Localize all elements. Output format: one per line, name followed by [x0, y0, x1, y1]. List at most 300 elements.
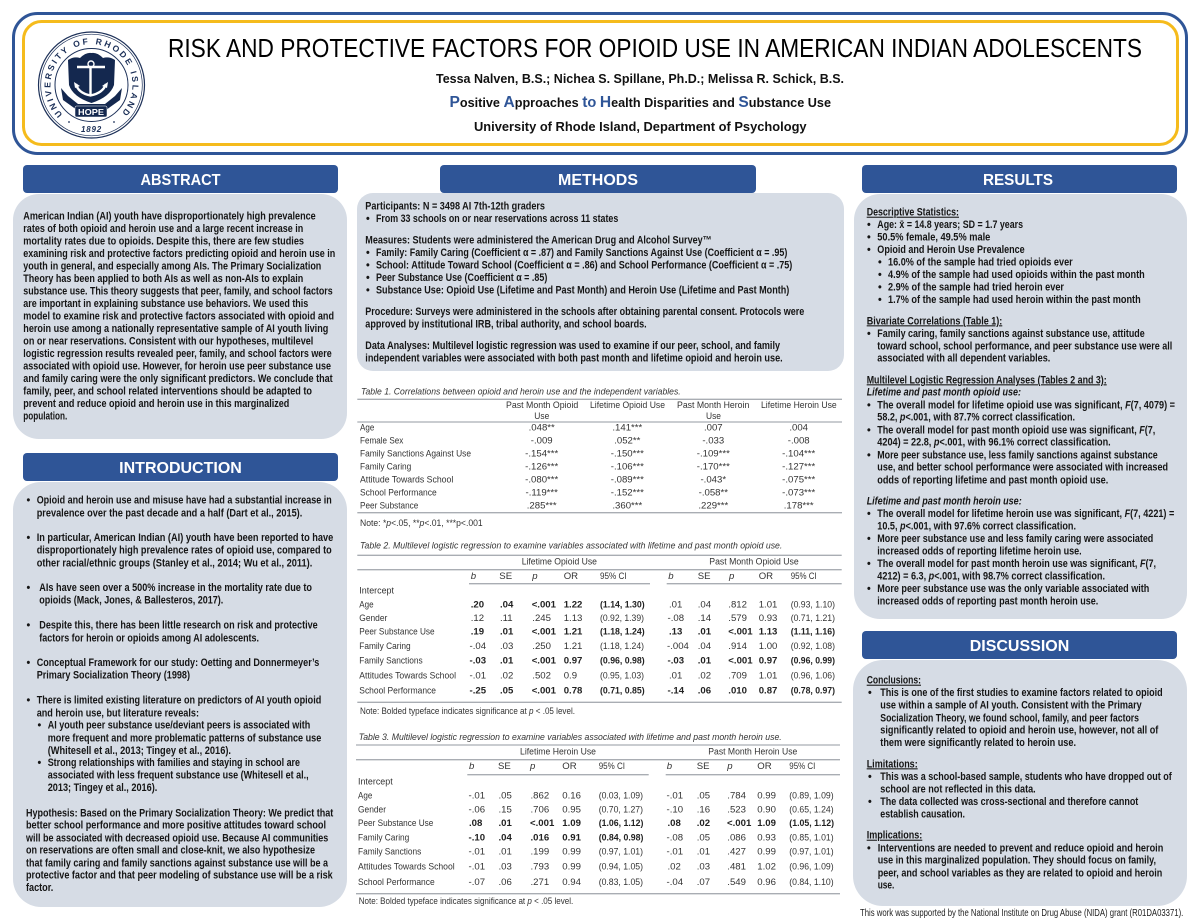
table 2 rows: Age	[359, 599, 374, 610]
regression analyses: Lifetime and past month opioid use:	[867, 387, 1021, 399]
heading: discussion: DISCUSSION	[970, 638, 1069, 655]
table 2 column headers: SE	[698, 571, 711, 582]
table 2 rows: <.001	[728, 627, 753, 638]
table 3 rows: .08	[668, 818, 682, 829]
table 3 rows: .01	[498, 847, 512, 858]
table 3 column headers: Lifetime Heroin Use	[520, 746, 596, 757]
methods text: School: Attitude Toward School (Coefficient α = .86) and School Performance (Coefficient α = .75)	[376, 260, 793, 272]
icon: University of Rhode Island seal: 1892	[81, 125, 102, 134]
table 3 rows: Family Sanctions	[358, 847, 421, 858]
table 3 rows: (0.83, 1.05)	[599, 877, 643, 888]
table 3 column headers: Past Month Heroin Use	[708, 746, 797, 757]
introduction bullets: •	[26, 495, 30, 507]
methods text: •	[366, 260, 370, 272]
methods text: •	[366, 285, 370, 297]
table 2 rows: (0.92, 1.39)	[600, 613, 644, 624]
table 2 rows: (0.95, 1.03)	[600, 670, 644, 681]
table 3: heroin regression	[356, 732, 840, 907]
heading: methods: METHODS	[558, 172, 638, 189]
table 3 rows: 0.16	[562, 791, 581, 802]
table 2 rows: .01	[669, 670, 682, 681]
abstract text: prevent and reduce opioid and heroin use in this marginalized	[23, 398, 289, 410]
table 3 rows: -.01	[468, 791, 485, 802]
introduction bullets: There is limited existing literature on predictors of AI youth opioid	[37, 695, 321, 707]
table 1: correlations	[357, 386, 842, 529]
conclusions: use within a sample of AI youth. Consistent with the Primary	[880, 700, 1142, 712]
table 3 rows: 1.09	[757, 818, 776, 829]
table 3 rows: .706	[530, 804, 549, 815]
table 1 rows: -.043*	[700, 474, 726, 485]
table 3 rows: Intercept	[358, 776, 393, 787]
table 2 column headers: OR	[564, 571, 578, 582]
table 2 rows: .11	[500, 613, 513, 624]
panel: abstract	[13, 165, 347, 439]
table 2 rows: .01	[669, 599, 682, 610]
table 2 rows: .579	[728, 613, 747, 624]
implications	[867, 830, 1163, 892]
table 3 rows: .05	[697, 832, 710, 843]
table 3 rows: 1.02	[757, 862, 776, 873]
table 1 rows: -.127***	[782, 462, 815, 473]
table 3 rows: .03	[498, 862, 512, 873]
descriptive statistics: Age: x̄ = 14.8 years; SD = 1.7 years	[877, 219, 1023, 231]
table 2 rows: <.001	[532, 655, 557, 666]
table 1 rows: .048**	[529, 423, 555, 434]
table 3 rows: -.06	[468, 804, 485, 815]
table 3 rows: .06	[498, 877, 512, 888]
descriptive statistics: •	[878, 282, 882, 294]
table 2 rows: .709	[728, 670, 747, 681]
abstract text: are important in explaining substance use behaviors. We used this	[23, 298, 308, 310]
table 3 rows: 0.95	[562, 804, 581, 815]
table 3 column headers: OR	[562, 761, 577, 772]
introduction bullets: prevalence over the past decade and a half (Dart et al., 2015).	[37, 507, 302, 519]
limitations: establish causation.	[880, 808, 965, 820]
heading: introduction	[23, 453, 338, 481]
introduction bullets: other racial/ethnic groups (Stanley et al., 2014; Wu et al., 2011).	[37, 557, 312, 569]
table 3 column headers: p	[726, 761, 733, 772]
table 2 rows: Family Caring	[359, 641, 411, 652]
methods text: •	[366, 272, 370, 284]
methods text: Family: Family Caring (Coefficient α = .87) and Family Sanctions Against Use (Coefficient α = .95)	[376, 247, 788, 259]
regression analyses: •	[867, 399, 871, 411]
table 3 rows: .271	[530, 877, 549, 888]
introduction bullets: •	[38, 757, 42, 769]
table 2 column headers: SE	[499, 571, 512, 582]
descriptive statistics: 2.9% of the sample had tried heroin ever	[888, 282, 1064, 294]
introduction bullets: In particular, American Indian (AI) youth have been reported to have	[37, 532, 333, 544]
table 2 column headers: 95% CI	[791, 571, 817, 582]
introduction bullets: •	[26, 582, 30, 594]
panel: discussion	[853, 631, 1187, 906]
table 3 rows: (0.85, 1.01)	[789, 832, 834, 843]
table 3 rows: -.01	[666, 847, 683, 858]
bivariate correlations	[867, 315, 1172, 365]
heading: introduction: INTRODUCTION	[119, 460, 242, 477]
regression analyses: The overall model for past month heroin use was significant, F(7,	[877, 558, 1156, 570]
table 2 rows: (0.71, 1.21)	[791, 613, 835, 624]
descriptive statistics: •	[867, 244, 871, 256]
descriptive statistics: •	[867, 232, 871, 244]
table 2 column headers: Lifetime Opioid Use	[522, 556, 597, 567]
authors: Tessa Nalven, B.S.; Nichea S. Spillane, Ph.D.; Melissa R. Schick, B.S.	[436, 72, 844, 86]
table 3 rows: .02	[697, 818, 710, 829]
regression analyses: The overall model for past month opioid use was significant, F(7,	[877, 424, 1155, 436]
conclusions	[867, 675, 1163, 749]
methods text: Procedure: Surveys were administered in the schools after obtaining parental consent. Protocols were	[365, 306, 804, 318]
table 3 rows: 0.93	[757, 832, 776, 843]
table 3 rows: .05	[498, 791, 512, 802]
table 2 rows: -.03	[470, 655, 486, 666]
table 3 rows: .01	[697, 847, 710, 858]
table 3 rows: (0.94, 1.05)	[599, 862, 643, 873]
icon: University of Rhode Island seal: UNIVERSITY OF RHODE ISLAND	[44, 38, 138, 118]
table 1 column headers	[506, 400, 837, 422]
table 3 rows: 0.94	[562, 877, 582, 888]
table 3 rows: 0.99	[757, 791, 776, 802]
table 2 column headers: OR	[759, 571, 773, 582]
table 1 note: Note: *p<.05, **p<.01, ***p<.001	[360, 518, 483, 529]
table 1 rows: -.033	[702, 436, 724, 447]
abstract text: Theory has been applied to both AIs as well as non-AIs to explain	[23, 273, 303, 285]
descriptive statistics: •	[878, 294, 882, 306]
abstract text: American Indian (AI) youth have disproportionately high prevalence	[23, 211, 316, 223]
regression analyses: The overall model for lifetime opioid use was significant, F(7, 4079) =	[877, 399, 1175, 411]
regression analyses: Multilevel Logistic Regression Analyses (Tables 2 and 3):	[867, 374, 1107, 386]
hypothesis text: that family caring and family sanctions against substance use will be a	[26, 857, 329, 869]
table 3 rows: (0.03, 1.09)	[599, 791, 643, 802]
abstract text: substance use. This theory suggests that peer, family, and school factors	[23, 286, 333, 298]
table 2 rows: Family Sanctions	[359, 655, 423, 666]
hypothesis text: better school performance and more positive attitudes toward school	[26, 820, 326, 832]
table 3 rows: -.10	[468, 832, 485, 843]
heading: results: RESULTS	[983, 172, 1053, 189]
table 3 rows: <.001	[727, 818, 752, 829]
table 3 rows: .07	[697, 877, 710, 888]
table 3 rows: (0.96, 1.09)	[789, 862, 834, 873]
table 2 rows: 0.97	[564, 655, 582, 666]
implications: use in this marginalized population. They should focus on family,	[878, 855, 1156, 867]
introduction bullets: AI youth peer substance use/deviant peers is associated with	[48, 720, 310, 732]
methods text: Peer Substance Use (Coefficient α = .85)	[376, 272, 548, 284]
table 3 column headers: SE	[498, 761, 511, 772]
table 1 rows: -.073***	[782, 487, 815, 498]
table 2 rows: (0.92, 1.08)	[791, 641, 835, 652]
table 2 rows: School Performance	[359, 686, 436, 697]
introduction bullets: and heroin use, but literature reveals:	[37, 707, 199, 719]
affiliation: University of Rhode Island, Department of Psychology	[474, 119, 807, 134]
table 3 rows: .02	[668, 862, 681, 873]
table 1 column headers: Past Month Opioid	[506, 400, 578, 411]
table 2 rows: .04	[698, 599, 712, 610]
introduction bullets	[26, 495, 333, 794]
table 2 caption: Table 2. Multilevel logistic regression to examine variables associated with lifetime and past month opioid use.	[360, 540, 782, 551]
table 1 rows: -.075***	[782, 474, 815, 485]
table 3 rows: (0.97, 1.01)	[599, 847, 643, 858]
table 3 rows: (0.89, 1.09)	[789, 791, 834, 802]
table 1 column headers: Use	[534, 411, 549, 422]
regression analyses: •	[867, 533, 871, 545]
table 3 rows: .862	[530, 791, 549, 802]
table 2 rows: .05	[500, 686, 514, 697]
introduction bullets: •	[26, 657, 30, 669]
table 1 rows: .360***	[612, 500, 643, 511]
abstract text: youth in general, and especially among AIs. The Primary Socialization	[23, 261, 321, 273]
table 1 rows: Age	[360, 423, 374, 434]
table 2 rows: 1.22	[564, 599, 582, 610]
table 3 column headers: p	[529, 761, 536, 772]
table 1 rows: -.008	[788, 436, 810, 447]
table 1 column headers: Lifetime Opioid Use	[590, 400, 665, 411]
methods text: Measures: Students were administered the American Drug and Alcohol Survey™	[365, 235, 712, 247]
table 2 rows: (0.96, 1.06)	[791, 670, 835, 681]
panel: introduction	[13, 453, 347, 907]
introduction bullets: Strong relationships with families and staying in school are	[48, 757, 300, 769]
panel: results	[854, 165, 1187, 619]
bivariate correlations: associated with all dependent variables.	[877, 353, 1050, 365]
table 2 rows: -.004	[667, 641, 690, 652]
table 2 rows: .502	[532, 670, 551, 681]
regression analyses: increased odds of reporting past month heroin use.	[877, 596, 1098, 608]
bivariate correlations: •	[867, 328, 871, 340]
table 3 rows	[358, 776, 834, 888]
heading: results	[862, 165, 1177, 193]
abstract text: on or near reservations. Consistent with our hypotheses, multilevel	[23, 336, 313, 348]
table 1 rows: -.089***	[611, 474, 644, 485]
table 2 rows: (0.78, 0.97)	[791, 686, 835, 697]
table 3 rows: (1.05, 1.12)	[789, 818, 834, 829]
table 2: opioid regression	[357, 540, 842, 717]
table 3 rows: -.01	[468, 862, 485, 873]
table 2 column headers: 95% CI	[600, 571, 627, 582]
regression analyses: More peer substance use was the only variable associated with	[877, 583, 1149, 595]
table 1 rows: Attitude Towards School	[360, 474, 453, 485]
introduction bullets: factors for heroin or opioids among AI adolescents.	[39, 632, 259, 644]
limitations: school are not reflected in this data.	[880, 783, 1036, 795]
table 2 rows: (1.11, 1.16)	[791, 627, 835, 638]
table 1 column headers: Use	[706, 411, 721, 422]
table 2 rows: 1.01	[759, 670, 777, 681]
conclusions: Conclusions:	[867, 675, 921, 687]
table 3 column headers: b	[469, 761, 475, 772]
hypothesis text: factor.	[26, 882, 53, 894]
table 3 rows: (0.97, 1.01)	[789, 847, 834, 858]
table 1 rows: .285***	[527, 500, 557, 511]
table 3 note: Note: Bolded typeface indicates significance at p < .05 level.	[359, 896, 573, 907]
table 1 rows: -.109***	[697, 449, 730, 460]
table 1 rows: .004	[789, 423, 809, 434]
introduction bullets: Conceptual Framework for our study: Oetting and Donnermeyer’s	[37, 657, 319, 669]
regression analyses: •	[867, 583, 871, 595]
table 2 rows: Attitudes Towards School	[359, 670, 456, 681]
hypothesis text: protective factor and that peer modeling of substance use will be a risk	[26, 870, 333, 882]
table 1 column headers: Past Month Heroin	[677, 400, 749, 411]
table 3 column headers: OR	[757, 761, 772, 772]
conclusions: •	[868, 687, 872, 699]
table 3 column headers: SE	[697, 761, 710, 772]
table 1 rows: -.106***	[611, 462, 644, 473]
regression analyses: 10.5, p<.001, with 97.6% correct classification.	[877, 521, 1076, 533]
table 2 rows: .245	[532, 613, 551, 624]
descriptive statistics	[867, 207, 1145, 306]
table 2 rows: .04	[500, 599, 514, 610]
table 2 rows: 1.21	[564, 627, 583, 638]
table 2 column headers: b	[668, 571, 674, 582]
table 2 rows: .01	[500, 655, 514, 666]
abstract text: examining risk and protective factors predicting opioid and heroin use in	[23, 248, 335, 260]
abstract text: logistic regression results revealed peer, family, and school factors were	[23, 348, 332, 360]
regression analyses: More peer substance use and less family caring were associated	[877, 533, 1153, 545]
table 2 rows: -.04	[470, 641, 487, 652]
table 1 rows: -.104***	[782, 449, 815, 460]
methods text: •	[366, 213, 370, 225]
table 3 rows: -.08	[666, 832, 683, 843]
introduction bullets: •	[26, 620, 30, 632]
table 2 column headers	[471, 556, 817, 582]
descriptive statistics: 1.7% of the sample had used heroin within the past month	[888, 294, 1141, 306]
table 2 rows: .19	[471, 627, 484, 638]
table 2 rows: .12	[471, 613, 484, 624]
table 2 column headers: p	[728, 571, 735, 582]
table 2 rows: .06	[698, 686, 711, 697]
introduction bullets: 2013; Tingey et al., 2016).	[48, 782, 157, 794]
table 3 rows: (0.65, 1.24)	[789, 804, 834, 815]
descriptive statistics: •	[878, 269, 882, 281]
abstract text: rates of both opioid and heroin use and a large recent increase in	[23, 223, 303, 235]
regression analyses: Lifetime and past month heroin use:	[867, 496, 1022, 508]
introduction bullets: Opioid and heroin use and misuse have had a substantial increase in	[37, 495, 332, 507]
regression analyses: 4212) = 6.3, p<.001, with 98.7% correct classification.	[877, 571, 1105, 583]
table 2 rows: .01	[698, 627, 712, 638]
table 2 rows: 1.21	[564, 641, 582, 652]
table 2 note: Note: Bolded typeface indicates significance at p < .05 level.	[360, 706, 575, 717]
table 3 rows: .15	[498, 804, 512, 815]
table 3 rows: Age	[358, 791, 372, 802]
table 3 rows: -.04	[666, 877, 684, 888]
table 2 rows: 0.9	[564, 670, 577, 681]
table 3 rows: (0.84, 0.98)	[599, 832, 643, 843]
hypothesis text: will be associated with decreased opioid use. Because AI communities	[25, 832, 328, 844]
table 3 rows: 0.99	[757, 847, 776, 858]
table 2 rows: -.03	[668, 655, 684, 666]
table 3 column headers: 95% CI	[789, 761, 815, 772]
table 1 rows: Peer Substance	[360, 500, 418, 511]
introduction bullets: (Whitesell et al., 2013; Tingey et al., 2016).	[48, 745, 231, 757]
table 2 rows: .13	[669, 627, 682, 638]
introduction bullets: more frequent and more problematic patterns of substance use	[48, 732, 321, 744]
table 3 rows: (0.70, 1.27)	[599, 804, 643, 815]
table 1 rows: -.126***	[525, 462, 558, 473]
table 3 rows: -.01	[666, 791, 683, 802]
table 2 rows: .03	[500, 641, 513, 652]
table 3 column headers: 95% CI	[599, 761, 625, 772]
table 2 rows: -.25	[470, 686, 487, 697]
table 2 rows: (1.18, 1.24)	[600, 627, 645, 638]
table 1 rows: Family Sanctions Against Use	[360, 449, 471, 460]
table 3 rows: .04	[498, 832, 513, 843]
table 2 rows: <.001	[532, 686, 557, 697]
table 3 rows: Attitudes Towards School	[358, 862, 455, 873]
methods text: independent variables were associated with both past month and lifetime opioid and heroin use.	[365, 352, 783, 364]
table 3 rows: .16	[697, 804, 710, 815]
table 2 rows: (1.14, 1.30)	[600, 599, 645, 610]
table 2 rows: Intercept	[359, 585, 394, 596]
regression analyses: 4204) = 22.8, p<.001, with 96.1% correct classification.	[877, 437, 1111, 449]
lab name: Positive Approaches to Health Disparities and Substance Use	[450, 94, 831, 111]
table 1 rows: Female Sex	[360, 436, 403, 447]
table 2 column headers: p	[531, 571, 538, 582]
methods text: From 33 schools on or near reservations across 11 states	[376, 213, 618, 225]
table 2 rows: 1.13	[564, 613, 582, 624]
table 2 rows: .010	[728, 686, 747, 697]
regression analyses: •	[867, 424, 871, 436]
methods text: Participants: N = 3498 AI 7th-12th graders	[365, 201, 545, 213]
table 3 rows: 0.99	[562, 847, 581, 858]
table 2 rows: .812	[728, 599, 747, 610]
table 2 rows: .250	[532, 641, 551, 652]
table 1 rows: -.150***	[611, 449, 644, 460]
table 2 rows: (0.96, 0.98)	[600, 655, 645, 666]
table 1 rows: School Performance	[360, 487, 437, 498]
regression analyses: increased odds of reporting lifetime heroin use.	[877, 546, 1082, 558]
bivariate correlations: Bivariate Correlations (Table 1):	[867, 315, 1002, 327]
table 1 caption: Table 1. Correlations between opioid and heroin use and the independent variables.	[361, 386, 681, 397]
limitations: •	[868, 796, 872, 808]
abstract text: and family caring were the only significant predictors. We conclude that	[23, 373, 333, 385]
table 3 rows: .549	[727, 877, 746, 888]
table 2 column headers: b	[471, 571, 477, 582]
table 2 rows: 0.87	[759, 686, 777, 697]
table 2 rows: .01	[500, 627, 514, 638]
descriptive statistics: Descriptive Statistics:	[867, 207, 959, 219]
hypothesis text	[25, 807, 334, 894]
introduction bullets: disproportionately high prevalence rates of opioid use, compared to	[37, 545, 332, 557]
regression analyses: 58.2, p<.001, with 87.7% correct classification.	[877, 412, 1075, 424]
table 3 rows: .086	[727, 832, 746, 843]
table 1 rows: .229***	[698, 500, 729, 511]
table 2 rows: Gender	[359, 613, 388, 624]
abstract text: family, peer, and school related interventions should be adapted to	[23, 386, 312, 398]
table 2 rows: (0.71, 0.85)	[600, 686, 645, 697]
table 1 rows: .178***	[784, 500, 814, 511]
heading: methods	[440, 165, 756, 193]
table 3 column headers	[469, 746, 815, 772]
table 3 rows: 0.90	[757, 804, 776, 815]
regression analyses	[867, 374, 1175, 608]
table 3 rows: Gender	[358, 804, 387, 815]
regression analyses: •	[867, 558, 871, 570]
introduction bullets: •	[38, 720, 42, 732]
regression analyses: The overall model for lifetime heroin use was significant, F(7, 4221) =	[877, 508, 1174, 520]
table 1 rows: -.152***	[611, 487, 644, 498]
table 3 rows: (0.84, 1.10)	[789, 877, 834, 888]
methods text: •	[366, 247, 370, 259]
introduction bullets: Despite this, there has been little research on risk and protective	[39, 620, 318, 632]
abstract text: population.	[23, 410, 67, 422]
descriptive statistics: •	[867, 219, 871, 231]
table 2 rows: <.001	[532, 599, 557, 610]
table 1 rows: .052**	[614, 436, 641, 447]
abstract text: heroin use among a nationally representative sample of AI youth living	[23, 323, 328, 335]
table 3 rows: Peer Substance Use	[358, 818, 433, 829]
table 3 rows: 0.91	[562, 832, 582, 843]
limitations: •	[868, 771, 872, 783]
table 2 rows: .02	[698, 670, 711, 681]
hypothesis text: Hypothesis: Based on the Primary Socialization Theory: We predict that	[26, 807, 334, 819]
icon: University of Rhode Island seal: HOPE	[78, 107, 104, 117]
descriptive statistics: Opioid and Heroin Use Prevalence	[877, 244, 1025, 256]
introduction bullets: Primary Socialization Theory (1998)	[37, 670, 190, 682]
